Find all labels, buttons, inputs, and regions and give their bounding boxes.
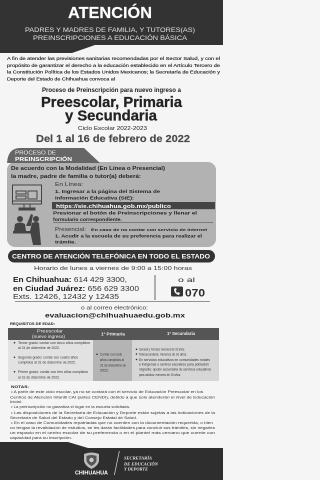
secretariat wordmark: SECRETARÍA xyxy=(124,456,152,460)
icon: phone xyxy=(171,286,183,296)
notes: • La preinscripción no garantiza el lugar en la escuela solicitada. xyxy=(11,404,130,409)
table headers: (nuevo ingreso) xyxy=(32,334,66,339)
main heading: Ciclo Escolar 2022-2023 xyxy=(78,126,147,132)
panel: proceso de preinscripción xyxy=(7,148,216,247)
panel intro text: la madre, padre de familia o tutor(a) deberá: xyxy=(11,174,141,180)
panel intro text xyxy=(11,166,165,180)
main heading: Preescolar, Primaria xyxy=(41,95,183,111)
title: ATENCIÓN xyxy=(68,4,152,22)
070 number xyxy=(171,277,205,300)
notes: Inicial. xyxy=(10,399,22,404)
secondary requirements xyxy=(136,348,211,377)
url bar xyxy=(52,202,215,210)
online instructions: Presionar el botón de Preinscripciones y llenar el xyxy=(53,210,197,216)
secondary requirements: para adultos: menores de 15 años. xyxy=(139,373,181,377)
phone numbers: En Chihuahua: 614 429 3300, xyxy=(13,275,127,284)
Chihuahua wordmark: CHIHUAHUA xyxy=(75,471,108,477)
table headers xyxy=(32,328,196,339)
primary requirements xyxy=(96,353,126,372)
panel intro text: De acuerdo con la Modalidad (En Línea o Presencial) xyxy=(11,166,165,172)
notes: • Las disposiciones de la Secretaría de Educación y Deporte están sujetas a las indicaciones de la xyxy=(11,410,216,415)
notes: un espacio en el centro escolar de su preferencia o en el plantel más cercano que cuente con xyxy=(10,430,215,435)
phone centre bar xyxy=(8,250,215,262)
icon: Chihuahua shield xyxy=(84,452,99,469)
secondary requirements: e indígenas o centros escolares para población xyxy=(139,363,209,367)
notes: no tengan la revalidación de estudios, se les darán facilidades para concluir sus trámites, sin negarles xyxy=(10,425,215,430)
secondary requirements: Telesecundaria: menores de 16 años. xyxy=(139,352,187,356)
preschool requirements: Primer grado: contar con tres años cumplidos xyxy=(18,370,88,374)
age requirements heading: REQUISITOS DE EDAD: xyxy=(10,321,55,326)
intro paragraph: Deporte del Estado de Chihuahua convoca al xyxy=(7,77,115,83)
requirements table xyxy=(8,328,219,381)
process tab: PROCESO DE xyxy=(15,150,57,156)
notes xyxy=(10,384,216,440)
process tab xyxy=(7,148,100,163)
subtitle: PADRES Y MADRES DE FAMILIA, Y TUTORES(AS) xyxy=(25,27,195,34)
online instructions xyxy=(52,182,215,222)
primary requirements: 31 de diciembre de xyxy=(100,363,126,367)
online instructions: Información Educativa (SIE): xyxy=(55,196,135,200)
in-person instructions: trámite. xyxy=(55,240,76,244)
in-person instructions: En caso de no contar con servicio de internet xyxy=(91,227,208,232)
secretariat wordmark xyxy=(123,456,159,472)
email: evaluacion@chihuahuaedu.gob.mx xyxy=(45,312,186,320)
notes: Secretaría de Salud del Estado y del Consejo Estatal de Salud. xyxy=(10,415,137,420)
secondary requirements: En servicios educativos en comunidades rurales xyxy=(139,358,210,362)
preschool requirements: al 31 de diciembre de 2022. xyxy=(18,346,60,350)
secondary requirements: migrante: opción secundaria de servicios educativos xyxy=(139,368,211,372)
preschool requirements: Tercer grado: contar con cinco años cumplidos xyxy=(18,341,90,345)
070 number: o al xyxy=(178,277,196,284)
notes: • En el caso de Comunidades repatriadas que no cuenten con la documentación requerida, o bien xyxy=(11,420,213,425)
email: o al correo electrónico: xyxy=(81,306,148,312)
notes: • A partir de este ciclo escolar, ya no se contará con el servicio de Educación Preescolar en los xyxy=(11,389,203,394)
intro paragraph: propósito de garantizar el derecho a la educación establecido en el Artículo Tercero de xyxy=(7,63,220,69)
in-person instructions: Presencial: xyxy=(55,227,86,233)
header band xyxy=(0,0,223,53)
online instructions: 1. Ingresar a la página del Sistema de xyxy=(55,189,161,194)
primary requirements: 2022. xyxy=(100,368,109,372)
main heading: y Secundaria xyxy=(65,108,158,124)
subtitle: PREINSCRIPCIONES A EDUCACIÓN BÁSICA xyxy=(33,33,188,42)
notes: Centros de Atención Infantil CAI (antes CENDI), debido a que solo atenderán el nivel de Educación xyxy=(10,394,215,399)
primary requirements: Contar con seis xyxy=(100,353,122,357)
intro paragraph xyxy=(7,56,221,83)
intro paragraph: A fin de atender las previsiones sanitarias recomendadas por el Sector Salud, y con el xyxy=(7,56,220,62)
phone numbers: en Ciudad Juárez: 656 629 3300 xyxy=(13,284,139,293)
primary requirements: años cumplidos al xyxy=(100,358,124,362)
table headers: 1º Primaria xyxy=(101,332,126,336)
main heading: Proceso de Preinscripción para nuevo ingreso a xyxy=(42,88,182,94)
phone numbers xyxy=(13,275,139,301)
preschool requirements: cumplidos al 31 de diciembre de 2022. xyxy=(18,360,76,364)
secretariat wordmark: Y DEPORTE xyxy=(124,467,148,472)
table headers: Preescolar xyxy=(37,328,64,334)
in-person instructions: 1. Acudir a la escuela de su preferencia para realizar el xyxy=(55,233,202,238)
in-person instructions xyxy=(55,227,208,244)
notes: NOTAS: xyxy=(11,384,29,389)
070 number: 070 xyxy=(185,288,205,300)
phone centre bar: CENTRO DE ATENCIÓN TELEFÓNICA EN TODO EL ESTADO xyxy=(12,252,210,260)
phone numbers: Exts. 12426, 12432 y 12435 xyxy=(13,292,119,301)
notes: capacidad para su inscripción. xyxy=(10,435,72,440)
url bar: https://sie.chihuahua.gob.mx/publico xyxy=(56,204,172,210)
icon: computer monitor xyxy=(12,185,42,210)
online instructions: En Línea: xyxy=(55,182,83,188)
intro paragraph: la Constitución Política de los Estados Unidos Mexicanos; la Secretaría de Educación y xyxy=(7,70,221,76)
icon: people at desk xyxy=(13,214,41,245)
schedule: Horario de lunes a viernes de 9:00 a 15:00 horas xyxy=(34,266,192,272)
footer band xyxy=(0,442,223,480)
main heading: Del 1 al 16 de febrero de 2022 xyxy=(36,133,190,145)
secretariat wordmark: DE EDUCACIÓN xyxy=(123,462,159,466)
preschool requirements xyxy=(14,341,90,379)
email xyxy=(45,306,186,320)
preschool requirements: Segundo grado: contar con cuatro años xyxy=(18,356,78,360)
secondary requirements: General y Técnica: menores de 15 años. xyxy=(139,348,185,352)
process tab: PREINSCRIPCIÓN xyxy=(15,155,72,163)
preschool requirements: al 31 de diciembre de 2022. xyxy=(18,375,60,379)
table headers: 1º Secundaria xyxy=(167,331,196,336)
online instructions: formulario correspondiente. xyxy=(53,217,122,222)
main heading xyxy=(36,88,190,145)
subtitle xyxy=(25,27,195,42)
